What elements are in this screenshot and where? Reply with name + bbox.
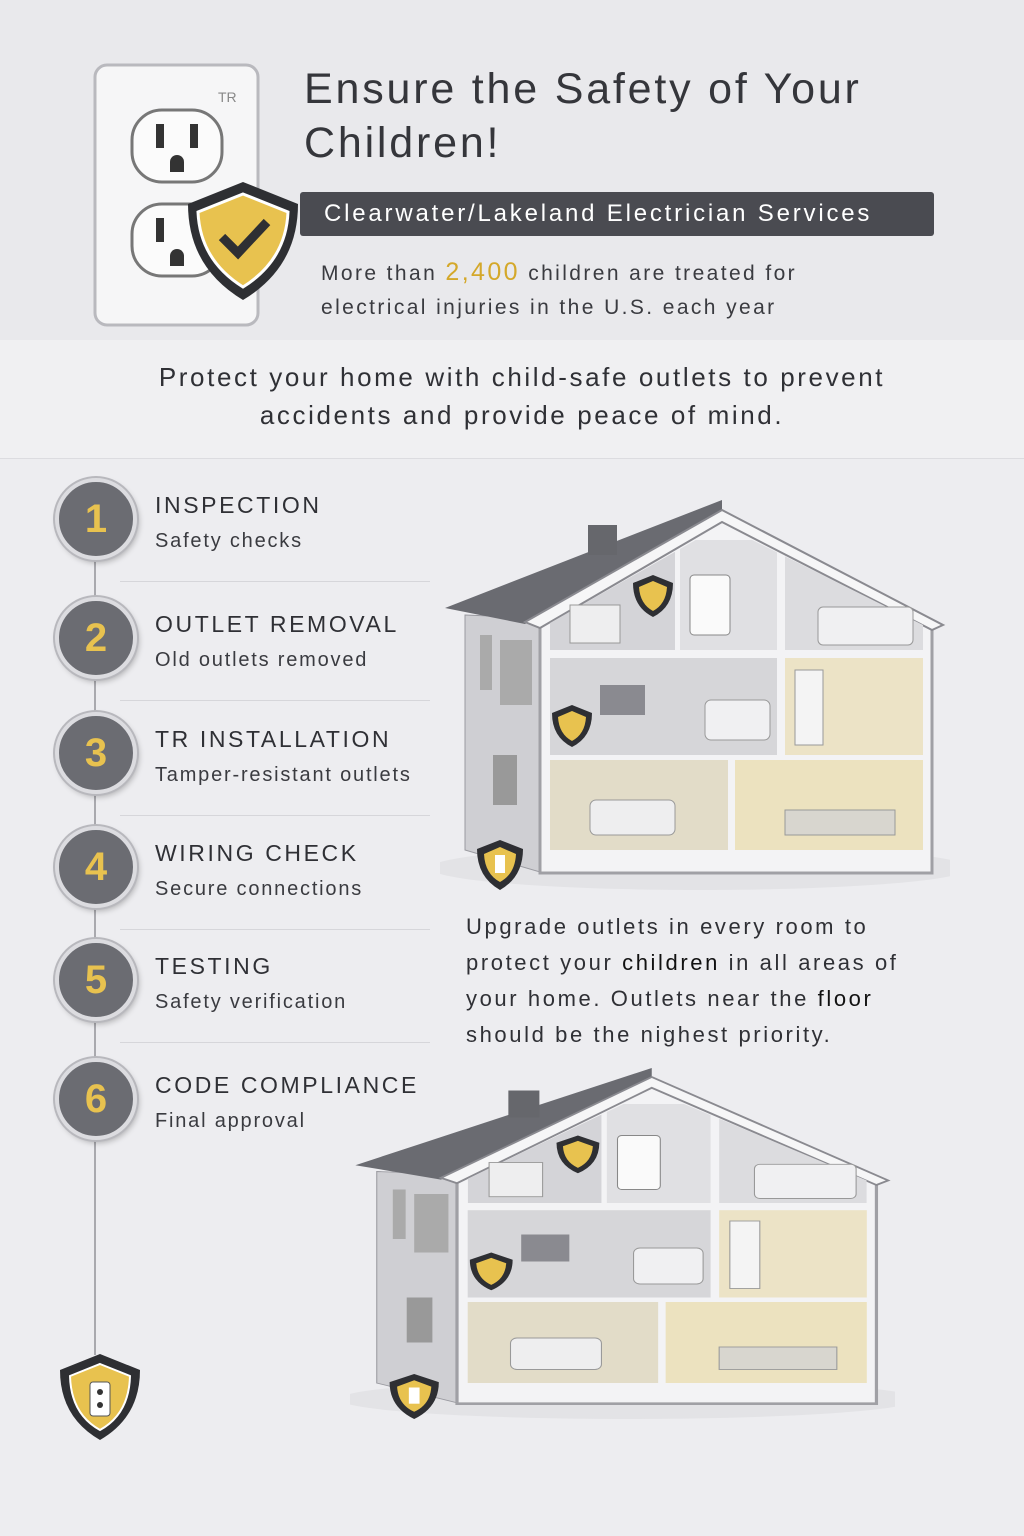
stat text: electrical injuries in the U.S. each year — [321, 296, 777, 319]
step 6: CODE COMPLIANCE — [155, 1072, 419, 1098]
step 2 — [53, 595, 430, 701]
step 4: 4 — [85, 845, 107, 889]
step 2: 2 — [85, 616, 107, 660]
icon: bottom shield — [60, 1354, 140, 1440]
step 5 — [53, 937, 430, 1043]
step 4 — [53, 824, 430, 930]
stat text: More than 2,400 children are treated for — [321, 258, 797, 286]
step 3 — [53, 710, 430, 816]
step 3: TR INSTALLATION — [155, 726, 391, 752]
step 6: 6 — [85, 1077, 107, 1121]
step 5: Safety verification — [155, 991, 347, 1013]
title — [304, 65, 862, 167]
paragraph: protect your children in all areas of — [466, 950, 899, 975]
slogan — [159, 362, 885, 430]
slogan: accidents and provide peace of mind. — [260, 400, 784, 430]
step 6: Final approval — [155, 1110, 306, 1132]
step 5: 5 — [85, 958, 107, 1002]
paragraph: your home. Outlets near the floor — [466, 986, 873, 1011]
paragraph: Upgrade outlets in every room to — [466, 914, 868, 939]
step 3: 3 — [85, 731, 107, 775]
paragraph: should be the nighest priority. — [466, 1022, 832, 1047]
illustration: house 2 — [350, 1068, 895, 1419]
timeline line — [94, 555, 96, 1355]
step 4: WIRING CHECK — [155, 840, 359, 866]
step 1: Safety checks — [155, 530, 303, 552]
step 2: OUTLET REMOVAL — [155, 611, 399, 637]
step 1: INSPECTION — [155, 492, 322, 518]
slogan: Protect your home with child-safe outlets to prevent — [159, 362, 885, 392]
banner — [300, 192, 934, 236]
step 3: Tamper-resistant outlets — [155, 764, 412, 786]
step 1 — [53, 476, 430, 582]
step 5: TESTING — [155, 953, 273, 979]
title: Ensure the Safety of Your — [304, 65, 862, 113]
icon: outlet with shield — [94, 64, 298, 326]
paragraph — [466, 914, 899, 1047]
step 2: Old outlets removed — [155, 649, 368, 671]
illustration: house 1 — [440, 500, 950, 890]
step 6 — [53, 1056, 419, 1146]
step 1: 1 — [85, 497, 107, 541]
slogan band — [0, 340, 1024, 459]
stat text — [321, 258, 797, 319]
icon: outlet with shield: TR — [218, 89, 237, 105]
step 4: Secure connections — [155, 878, 363, 900]
header band — [0, 0, 1024, 340]
banner: Clearwater/Lakeland Electrician Services — [324, 200, 872, 227]
title: Children! — [304, 119, 501, 167]
